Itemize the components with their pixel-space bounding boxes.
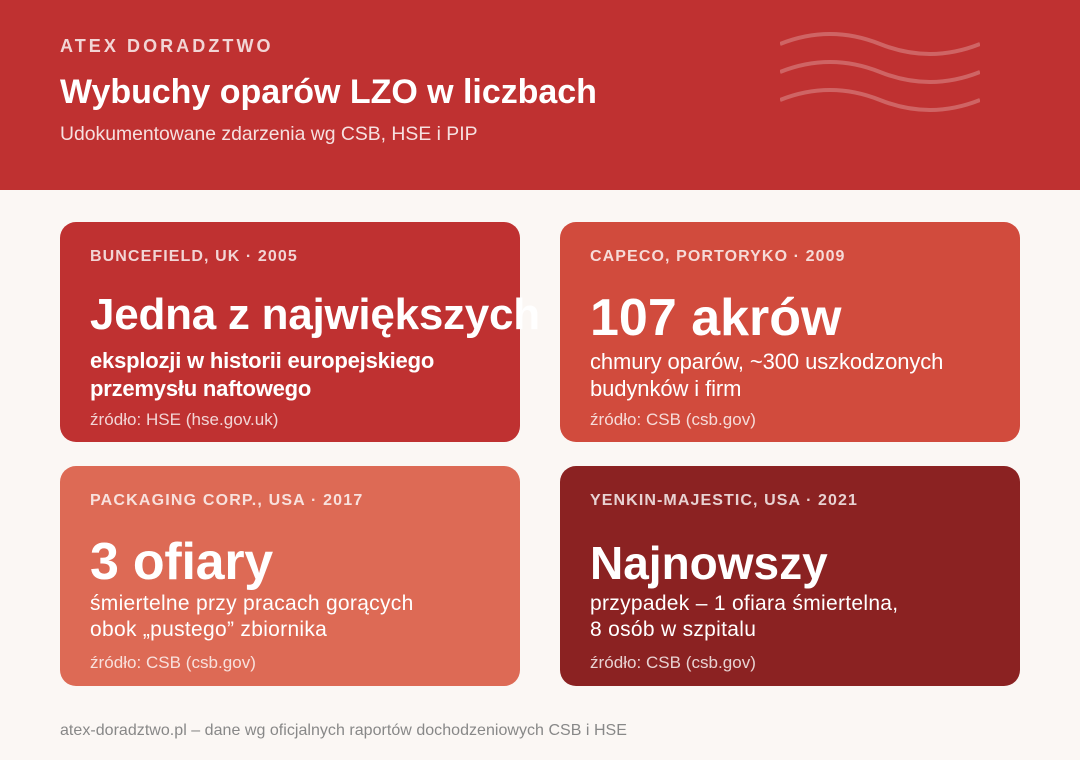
header band — [0, 0, 1080, 190]
source: źródło: CSB (csb.gov) — [590, 653, 756, 672]
description: obok „pustego” zbiornika — [90, 618, 327, 641]
panel: Capeco — [560, 222, 1020, 442]
subtitle: Udokumentowane zdarzenia wg CSB, HSE i PIP — [60, 123, 478, 145]
label: BUNCEFIELD, UK · 2005 — [90, 248, 298, 265]
description: 8 osób w szpitalu — [590, 618, 756, 641]
description: chmury oparów, ~300 uszkodzonych — [590, 349, 943, 374]
description: przypadek – 1 ofiara śmiertelna, — [590, 592, 898, 615]
panel: Yenkin-Majestic — [560, 466, 1020, 686]
headline: 3 ofiary — [90, 533, 273, 591]
description — [90, 348, 434, 401]
panel: Packaging Corp — [60, 466, 520, 686]
description — [590, 349, 943, 401]
description: eksplozji w historii europejskiego — [90, 348, 434, 373]
description: śmiertelne przy pracach gorących — [90, 592, 414, 615]
description: przemysłu naftowego — [90, 376, 311, 401]
eyebrow: ATEX DORADZTWO — [60, 36, 274, 56]
headline: Jedna z największych — [90, 290, 540, 339]
source: źródło: CSB (csb.gov) — [90, 653, 256, 672]
title: Wybuchy oparów LZO w liczbach — [60, 73, 597, 111]
label: PACKAGING CORP., USA · 2017 — [90, 492, 363, 509]
source: źródło: HSE (hse.gov.uk) — [90, 410, 278, 429]
label: YENKIN-MAJESTIC, USA · 2021 — [590, 492, 858, 509]
source: źródło: CSB (csb.gov) — [590, 410, 756, 429]
description: budynków i firm — [590, 376, 741, 401]
description — [590, 592, 898, 641]
panel: Buncefield — [60, 222, 520, 442]
headline: 107 akrów — [590, 289, 842, 347]
label: CAPECO, PORTORYKO · 2009 — [590, 248, 846, 265]
icon: vapour waves — [780, 32, 980, 112]
description — [90, 592, 414, 641]
footer: atex-doradztwo.pl – dane wg oficjalnych raportów dochodzeniowych CSB i HSE — [60, 722, 627, 739]
headline: Najnowszy — [590, 537, 828, 589]
